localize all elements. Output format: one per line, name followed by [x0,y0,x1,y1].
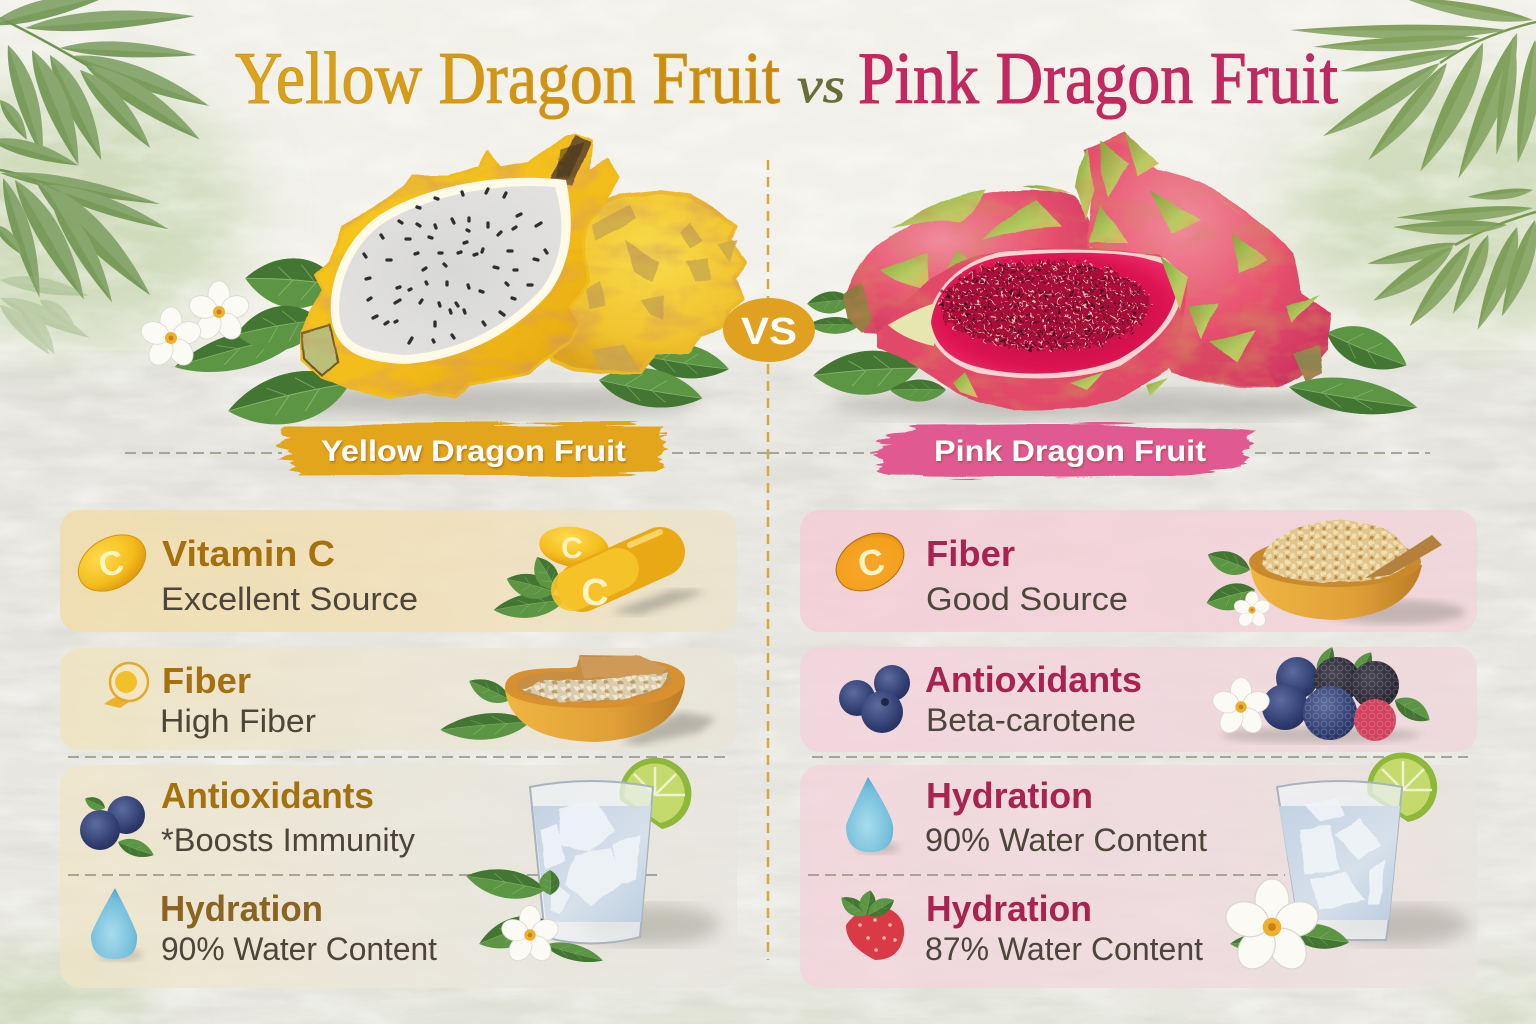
text: hydration [160,888,437,967]
back right pink fruit [1075,132,1331,388]
text: antioxidants [925,659,1142,738]
panel: vitamin C yellow [60,510,737,632]
text: antioxidants: Antioxidants [925,659,1142,700]
center divider line [767,160,769,960]
illustration: water glass with lime and flower [1221,752,1470,976]
illustration: pink dragon fruit [806,132,1420,423]
icon: orange capsule: C [854,540,888,585]
yellow column [60,510,737,988]
text: antioxidants: Beta-carotene [926,702,1136,738]
text: hydration 87: 87% Water Content [925,931,1203,967]
text: hydration: Hydration [160,888,323,929]
VS badge: VS [741,311,797,353]
title: Yellow Dragon Fruit [235,38,780,120]
cut pink fruit [877,248,1188,410]
VS badge [723,298,815,362]
text: hydration 87 [925,888,1203,967]
panel: hydration pink [800,752,1477,988]
text: fiber: Fiber [162,660,251,701]
banner: yellow dragon fruit: Yellow Dragon Fruit [321,435,626,468]
illustration: fiber bowl [439,655,716,745]
text: fiber [160,660,316,739]
text: antioxidants: Antioxidants [161,775,374,816]
icon: vitamin C capsule [68,523,156,603]
back whole yellow fruit [540,192,745,372]
banner: pink dragon fruit [870,424,1254,478]
text: hydration 90 [925,775,1207,858]
title [235,38,1338,120]
text: hydration: 90% Water Content [161,931,437,967]
icon: orange capsule [826,521,914,603]
text: hydration 90: 90% Water Content [925,822,1207,858]
illustration: capsules [492,522,706,622]
pink column [800,510,1477,988]
yellow fruit black seeds [364,189,547,343]
illustration: capsules: C [561,532,583,565]
illustration: yellow dragon fruit [138,135,745,437]
leaves and blossoms behind yellow fruit [138,255,732,437]
leaves behind pink fruit [806,290,1420,423]
illustration: capsules: C [581,572,609,614]
panel: antioxidants and hydration yellow [60,757,737,988]
back left pink fruit [843,185,1092,335]
panel: antioxidants pink [800,644,1477,752]
icon: blueberries [80,794,157,862]
text: vitamin C [161,533,418,617]
text: vitamin C: Excellent Source [161,581,418,617]
illustration: water glass with lime [464,758,720,968]
panel: fiber pink [800,510,1477,632]
text: antioxidants [161,775,415,858]
title: vs [797,57,845,113]
cut yellow fruit [302,135,618,397]
illustration: oat bowl [1204,520,1465,629]
decorative palm fronds: top right [1290,0,1536,334]
icon: water drop [91,888,142,961]
text: hydration 87: Hydration [926,888,1092,929]
illustration: mixed berries [1210,644,1435,743]
text: vitamin C: Vitamin C [162,533,335,574]
icon: water drop [846,777,900,854]
text: fiber: Good Source [926,581,1128,617]
title: Pink Dragon Fruit [858,38,1338,120]
panel: fiber yellow [60,648,737,750]
banner: yellow dragon fruit [276,424,666,477]
icon: blueberries [839,665,910,733]
icon: strawberry [837,889,904,960]
text: antioxidants: *Boosts Immunity [161,822,415,858]
decorative palm fronds: top left [0,0,214,359]
text: hydration 90: Hydration [926,775,1093,816]
dashed section rule [125,452,1430,454]
banner: pink dragon fruit: Pink Dragon Fruit [934,435,1206,468]
text: fiber: High Fiber [160,703,316,739]
text: fiber [926,533,1128,617]
text: fiber: Fiber [926,533,1015,574]
icon: vitamin C capsule: C [95,543,127,585]
icon: fruit slice [104,663,148,708]
